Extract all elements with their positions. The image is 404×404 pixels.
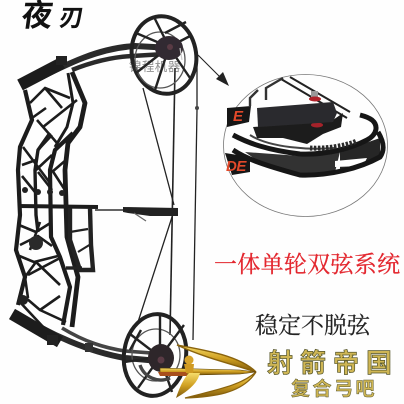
arrow rest and stabilizer bar [95,207,178,221]
upper limb [20,46,172,85]
arrow to detail view [198,55,229,86]
red bolt [309,91,321,102]
logo: gold arrow emblem [158,345,256,398]
upper logo strip: E [233,108,244,125]
caption: black: 稳定不脱弦 [255,313,371,338]
lower cam [119,310,191,400]
bow strings and cables [138,62,199,340]
bow illustration [12,10,203,400]
caption: red: 一体单轮双弦系统 [214,252,400,277]
watermark: 锦程机器 [129,59,181,74]
title: 夜刃 [19,0,85,33]
riser lattice [16,72,98,330]
title: 夜刃: 刃 [58,5,85,32]
cam wheel [233,115,383,175]
upper logo strip [227,106,251,127]
hub plate [253,113,343,144]
logo subtitle: 复合弓吧: 复合弓吧 [291,378,377,400]
upper cam [125,10,203,100]
grip [66,208,93,270]
detail circle: cam close-up [224,74,388,216]
logo text: 射箭帝国: 射箭帝国 [267,348,399,378]
cables [281,77,350,118]
lower logo strip: DE [226,158,247,175]
module block [257,102,337,127]
lower limb [12,313,170,362]
lower logo strip [225,153,250,175]
